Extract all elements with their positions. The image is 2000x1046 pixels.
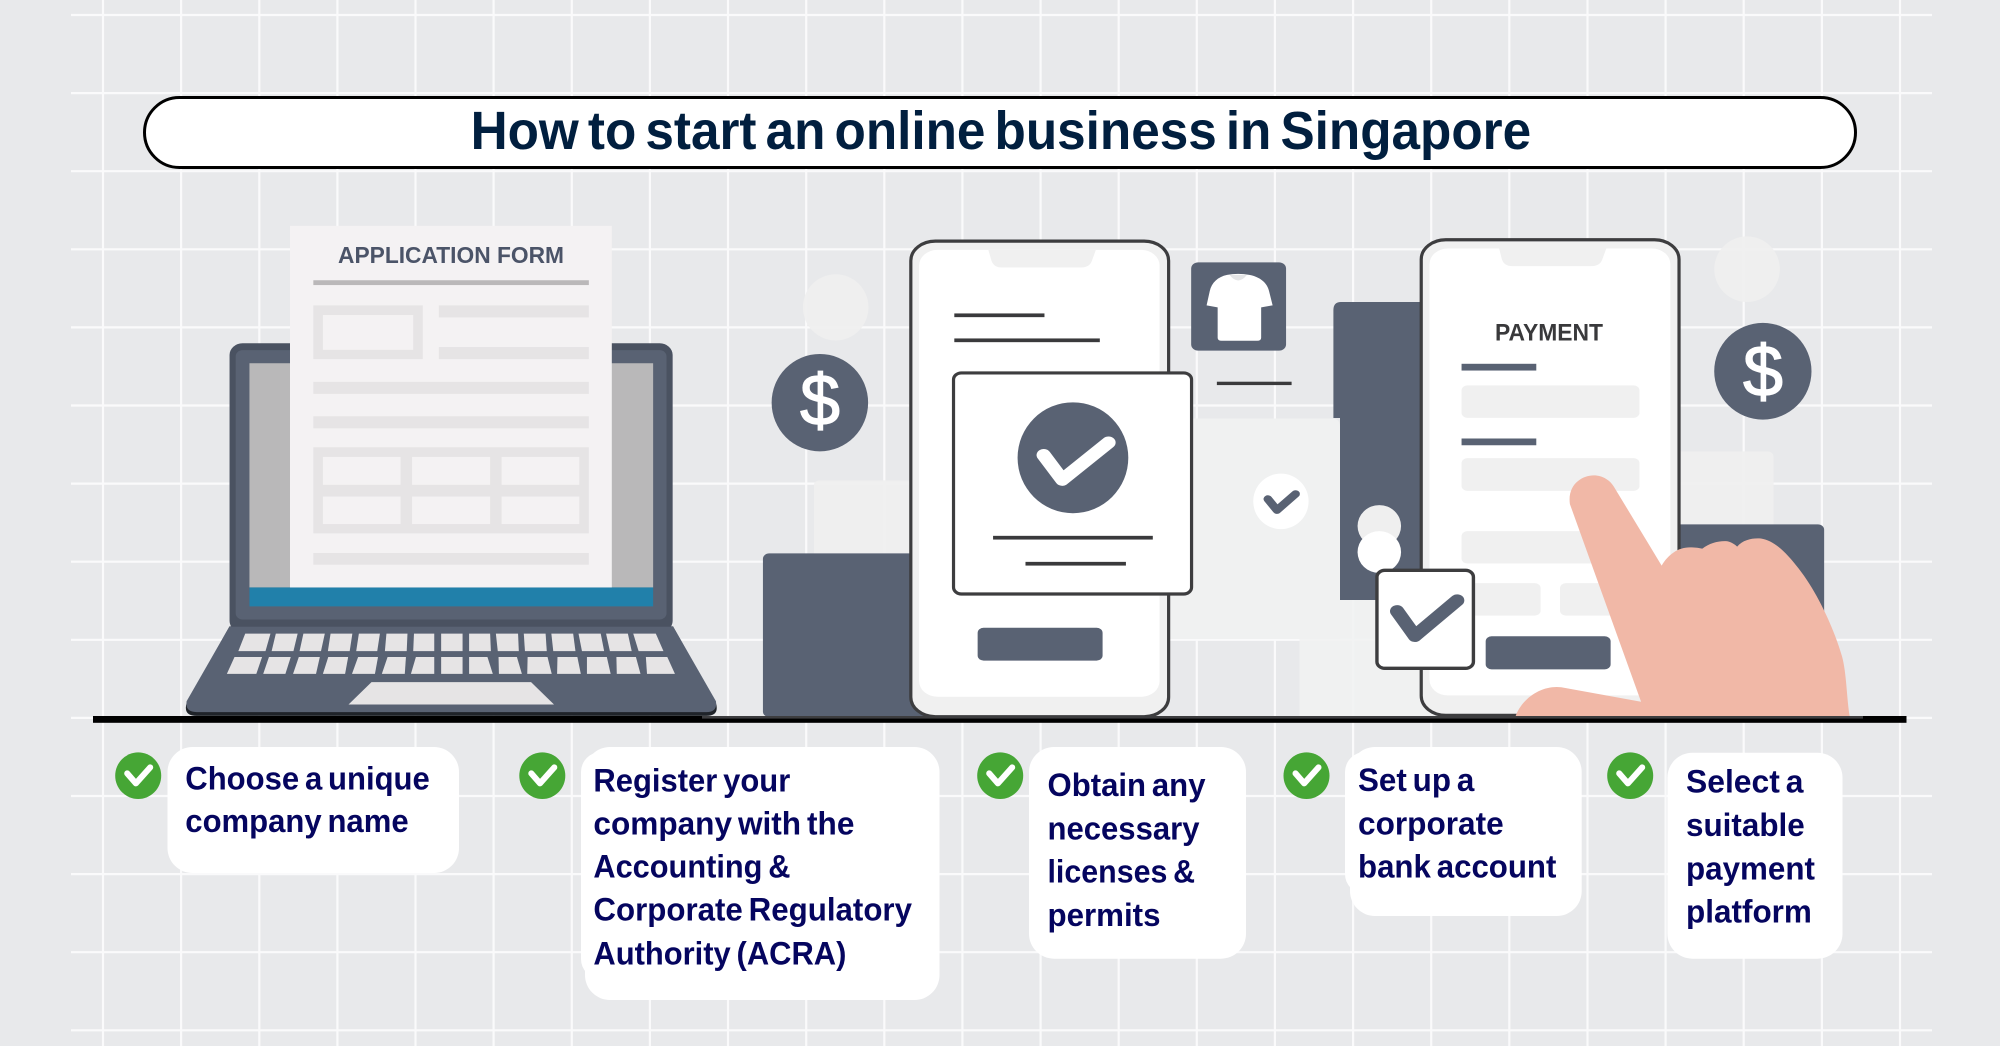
faint coin right: [1714, 236, 1780, 302]
dark back panel: [763, 553, 933, 717]
step 5 text: [1686, 764, 1815, 930]
step 4 check icon: [1284, 752, 1330, 799]
step 4 text: Set up a: [1358, 762, 1474, 798]
step 3 card: [1029, 747, 1246, 959]
phone 1: [911, 241, 1169, 717]
toggle circles: [1358, 505, 1401, 573]
step 3 text: necessary: [1048, 810, 1200, 846]
step 2 text: Register your: [593, 762, 790, 798]
dollar coin disc: [772, 354, 868, 451]
step 1 check icon: [115, 752, 161, 799]
step 5 card: [1667, 753, 1842, 959]
step 2 text: Corporate Regulatory: [593, 892, 912, 928]
title banner: How to start an online business in Singapore: [471, 101, 1531, 161]
t-shirt tile: [1191, 262, 1286, 351]
step 5: [1607, 752, 1842, 959]
dollar sign left: $: [800, 361, 840, 441]
product caption line: [1217, 382, 1292, 385]
illustration: left phone with approval card: [763, 262, 1292, 717]
faint back card: [814, 480, 933, 568]
illustration: dark back panel: [1333, 302, 1440, 600]
step 5 text: suitable: [1686, 807, 1805, 843]
step 3 text: [1048, 767, 1206, 933]
laptop lid: [230, 343, 673, 633]
step 1: [115, 747, 459, 873]
step 2 text: [593, 762, 912, 971]
ground line: [93, 716, 1906, 723]
title banner: [144, 98, 1856, 168]
step 4 text: corporate: [1358, 805, 1504, 841]
step 3 text: Obtain any: [1048, 767, 1206, 803]
step 1 card: [168, 747, 459, 873]
step 4 text: [1358, 762, 1557, 884]
laptop base: [186, 626, 717, 716]
step 3: [977, 747, 1246, 959]
keyboard: [227, 634, 675, 674]
dollar coin disc right: [1714, 323, 1811, 420]
illustration: laptop with application form: [186, 226, 717, 716]
step 5 text: Select a: [1686, 764, 1804, 800]
right-hand background shapes: [1660, 236, 1824, 660]
faint card right: [1660, 451, 1774, 532]
step 1 text: [185, 760, 430, 839]
step 3 check icon: [977, 752, 1023, 799]
step 3 text: permits: [1048, 897, 1160, 933]
step 4 text: bank account: [1358, 848, 1557, 884]
dark panel right: [1660, 524, 1824, 660]
faint coin: [803, 274, 869, 340]
phone 2: payment screen: [1421, 240, 1679, 715]
step 5 check icon: [1607, 752, 1653, 799]
step 2 text: company with the: [593, 805, 854, 841]
payment heading: PAYMENT: [1495, 320, 1603, 346]
step 4: [1284, 747, 1582, 916]
step 2: [519, 747, 940, 1000]
step 2 check icon: [519, 752, 565, 799]
step 2 text: Authority (ACRA): [593, 935, 846, 971]
trackpad: [349, 682, 554, 705]
step 1 text: company name: [185, 803, 409, 839]
step 3 text: licenses &: [1048, 854, 1195, 890]
step 4 card: [1345, 747, 1582, 916]
step 2 text: Accounting &: [593, 848, 790, 884]
dollar sign right: $: [1743, 332, 1783, 412]
checkbox tile: [1377, 570, 1473, 668]
pointing hand: [1515, 475, 1850, 717]
step 2 card: [581, 747, 940, 1000]
form heading: APPLICATION FORM: [338, 242, 564, 268]
step 5 text: platform: [1686, 894, 1812, 930]
application form paper: [290, 226, 612, 587]
small check badge: [1253, 474, 1309, 529]
approval card: [954, 373, 1192, 594]
illustration: faint product card: [1100, 418, 1440, 717]
step 5 text: payment: [1686, 850, 1815, 886]
step 1 text: Choose a unique: [185, 760, 430, 796]
